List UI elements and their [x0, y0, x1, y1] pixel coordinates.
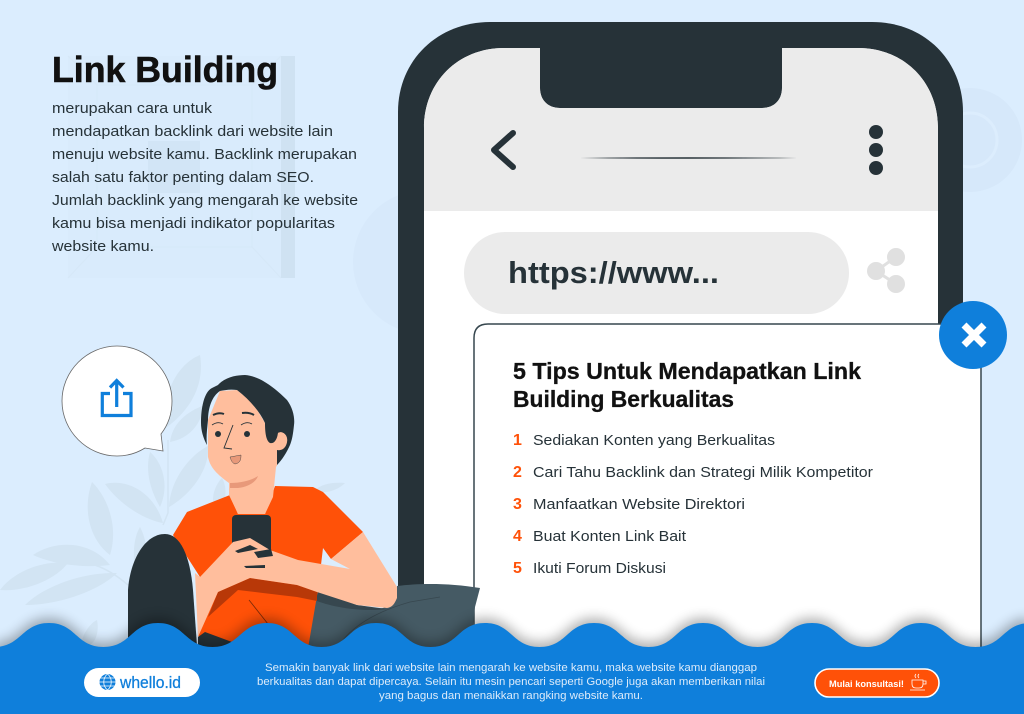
- phone in hand: [232, 515, 271, 565]
- button label: Mulai konsultasi!: [829, 679, 904, 690]
- phone: [398, 22, 963, 680]
- list numbers: 5: [513, 560, 522, 577]
- pillow crease: [343, 597, 440, 640]
- footer text: [257, 662, 765, 702]
- ear: [277, 432, 287, 450]
- shirt: [173, 486, 363, 660]
- footer text: yang bagus dan menaikkan rangking website kamu.: [379, 690, 643, 702]
- address line: [580, 157, 797, 159]
- panel: tips card: [474, 324, 981, 680]
- intro text block: Jumlah backlink yang mengarah ke website: [52, 192, 358, 209]
- icon: share upload: [102, 380, 131, 416]
- mouth: [230, 455, 241, 464]
- fingers on phone: [235, 545, 273, 568]
- list items: Cari Tahu Backlink dan Strategi Milik Kompetitor: [533, 464, 873, 481]
- hair: [201, 375, 294, 465]
- card heading: Building Berkualitas: [513, 386, 734, 412]
- background decoration: plant leaves: [0, 355, 345, 645]
- list items: Sediakan Konten yang Berkualitas: [533, 432, 775, 449]
- intro text block: [51, 100, 358, 255]
- icon: back chevron: [494, 133, 513, 167]
- intro text block: kamu bisa menjadi indikator popularitas: [52, 215, 335, 232]
- title: Link Building: [52, 49, 278, 90]
- face and neck: [208, 390, 290, 514]
- icon: coffee cup: [910, 674, 926, 690]
- list numbers: [513, 432, 522, 577]
- intro text block: salah satu faktor penting dalam SEO.: [52, 169, 314, 186]
- knee: [128, 534, 198, 660]
- list numbers: 1: [513, 432, 522, 449]
- url bar: [464, 232, 849, 314]
- logo pill: [84, 668, 200, 697]
- neck shadow: [230, 476, 258, 488]
- phone screen: [424, 48, 938, 680]
- footer text: berkualitas dan dapat dipercaya. Selain itu mesin pencari seperti Google juga akan memberikan nilai: [257, 676, 765, 688]
- intro text block: menuju website kamu. Backlink merupakan: [52, 146, 357, 163]
- icon: menu dots: [869, 125, 883, 175]
- character: man with phone: [128, 375, 480, 660]
- list items: [533, 432, 873, 577]
- url text: https://www...: [508, 255, 719, 290]
- icon: share nodes: [868, 248, 904, 292]
- background decoration: faint room frame: [68, 56, 295, 278]
- shirt fold line: [249, 600, 268, 624]
- leg lower: [198, 632, 232, 660]
- icon: close button: [939, 301, 1007, 369]
- list numbers: 2: [513, 464, 522, 481]
- wave shadow: [0, 618, 1024, 685]
- intro text block: mendapatkan backlink dari website lain: [52, 123, 333, 140]
- arms and hands: [195, 532, 397, 637]
- card heading: 5 Tips Untuk Mendapatkan Link: [513, 358, 861, 384]
- intro text block: merupakan cara untuk: [52, 100, 213, 117]
- list items: Buat Konten Link Bait: [533, 528, 687, 545]
- call to action button: [815, 669, 939, 697]
- card heading: [513, 358, 861, 412]
- shirt shadow: [208, 578, 317, 617]
- intro text block: website kamu.: [51, 238, 154, 255]
- list items: Ikuti Forum Diskusi: [533, 560, 666, 577]
- icon: globe: [100, 674, 116, 690]
- trouser shadow: [317, 590, 387, 610]
- list items: Manfaatkan Website Direktori: [533, 496, 745, 513]
- list numbers: 3: [513, 496, 522, 513]
- eyes brows nose: [212, 413, 254, 449]
- footer wave band: [0, 623, 1024, 714]
- list numbers: 4: [513, 528, 522, 545]
- speech bubble: [62, 346, 172, 456]
- footer text: Semakin banyak link dari website lain mengarah ke website kamu, maka website kamu dianggap: [265, 662, 757, 674]
- background decoration: faint circles: [353, 88, 1022, 334]
- phone header bar: [424, 48, 938, 211]
- logo text: whello.id: [119, 673, 181, 692]
- phone body: [398, 22, 963, 680]
- pillow: [300, 584, 480, 660]
